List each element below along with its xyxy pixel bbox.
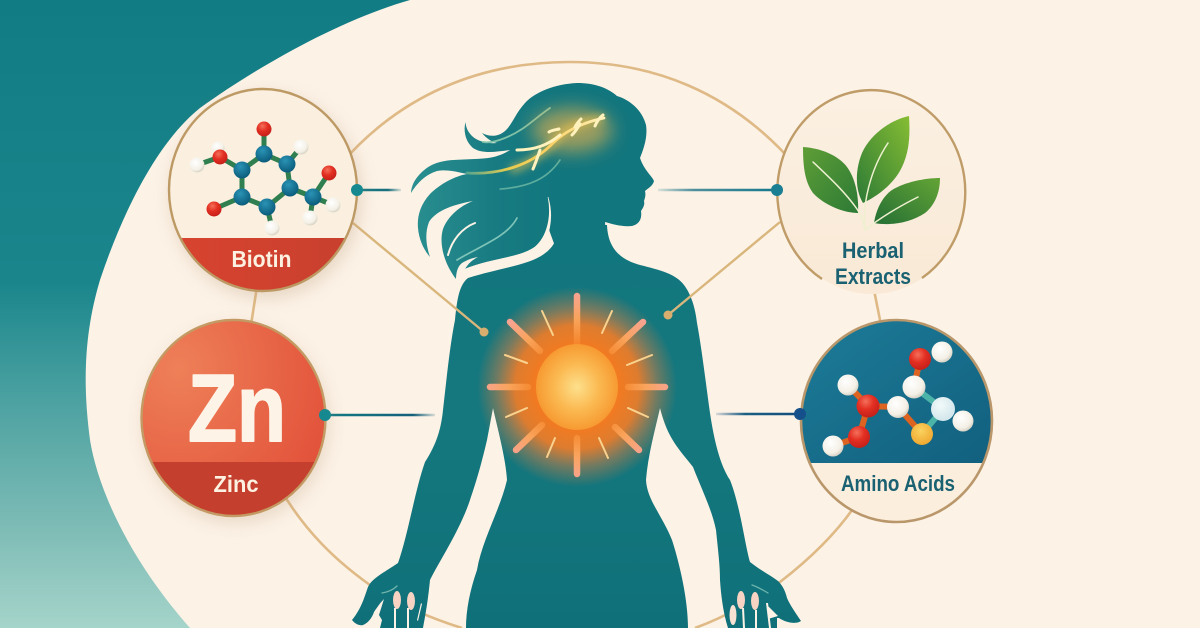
- glowing golden sprig in hair: [467, 108, 612, 173]
- panel: herbal extracts: [777, 90, 966, 294]
- amino label: Amino Acids: [841, 471, 955, 496]
- body: [352, 225, 801, 628]
- background panel: teal corner: [0, 0, 420, 628]
- flowing hair: [411, 83, 620, 279]
- shoulder connector dots: [480, 310, 672, 336]
- amino blue field: [802, 321, 991, 463]
- amino acid molecule icon: [822, 342, 974, 456]
- panel: herbal extracts: Extracts: [835, 264, 911, 289]
- herbal label: Herbal: [842, 238, 904, 263]
- hand finger details: [382, 585, 778, 628]
- herbal ring: [777, 90, 965, 279]
- connector: herbal: [658, 189, 777, 191]
- connector: biotin: [357, 189, 401, 191]
- hair gap highlights: [448, 108, 560, 269]
- sun energy burst on chest: [477, 287, 677, 487]
- zinc symbol: Zn: [188, 355, 286, 462]
- panel: amino acids: [795, 315, 1000, 522]
- head and face: [520, 83, 654, 260]
- gold orbit ring: [251, 62, 881, 628]
- sun core: [536, 344, 618, 430]
- panel: zinc: [130, 320, 340, 522]
- zinc label band: [152, 462, 314, 515]
- sun glow: [477, 287, 677, 487]
- connector: zinc: [325, 414, 435, 416]
- long rays: [490, 296, 665, 474]
- connector: amino: [716, 413, 800, 415]
- icon: leaves: [803, 116, 940, 230]
- biotin label: Biotin: [232, 246, 292, 272]
- panel: biotin: [160, 89, 370, 298]
- connector dots: [319, 184, 806, 421]
- gold connector lines to shoulders: [353, 222, 780, 332]
- red label band: [182, 238, 344, 290]
- female silhouette: [352, 83, 801, 628]
- zinc label: Zinc: [214, 471, 259, 497]
- biotin molecule icon: [190, 122, 340, 236]
- thin rays: [505, 311, 652, 458]
